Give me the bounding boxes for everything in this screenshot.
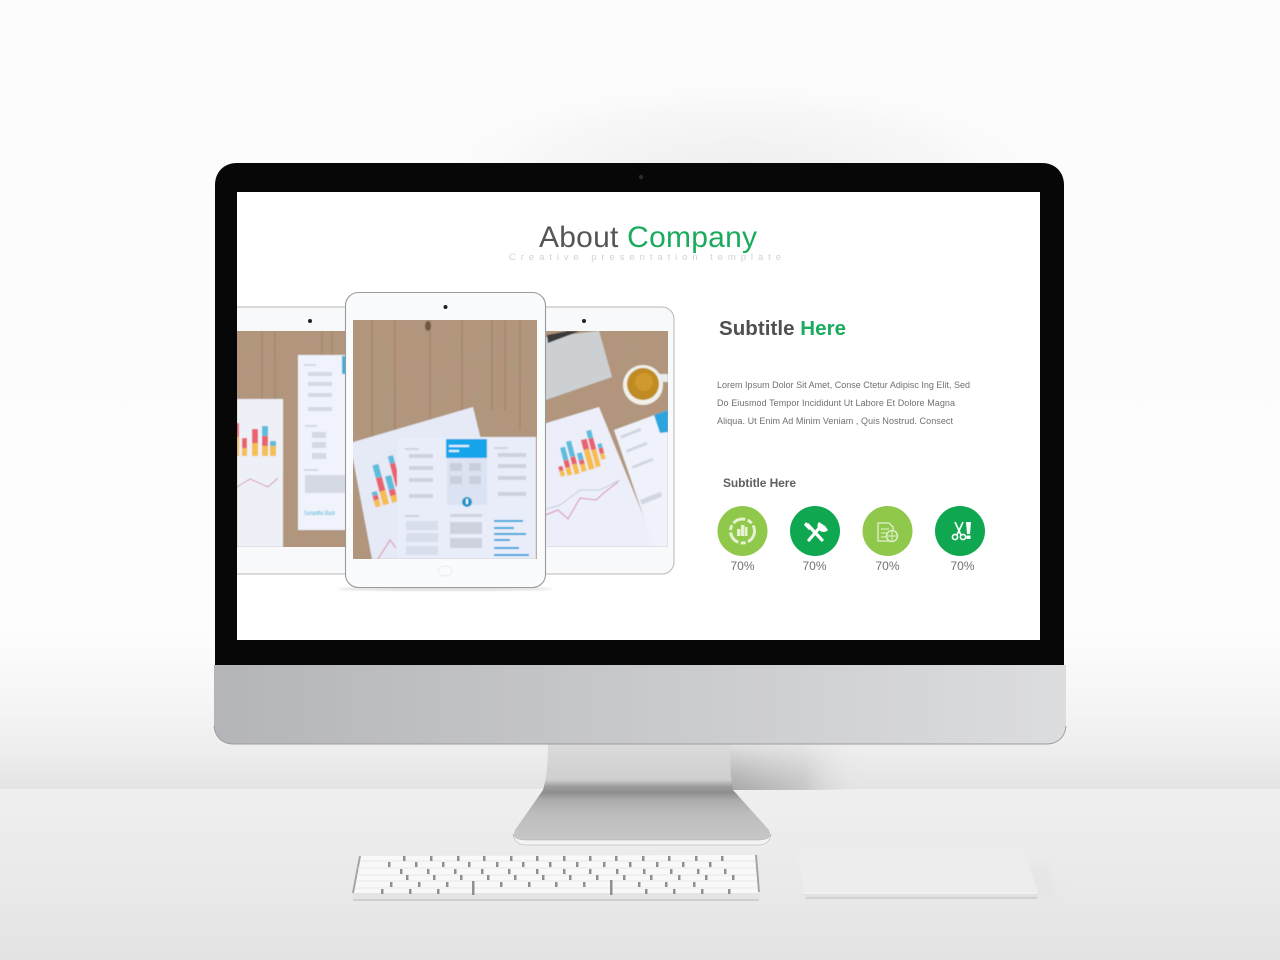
laptop <box>540 331 612 402</box>
stat: tools icon 70%: 70% <box>802 559 827 573</box>
trackpad <box>797 853 1056 898</box>
monitor black bezel <box>215 163 1064 665</box>
bar chart: right tablet <box>558 429 606 478</box>
body paragraph: Aliqua. Ut Enim Ad Minim Veniam , Quis Nostrud. Consect <box>717 416 953 426</box>
tablet: center <box>337 292 553 590</box>
monitor stand <box>513 744 864 845</box>
stat: chart icon 70%: 70% <box>730 559 755 573</box>
stat: document globe icon 70%: 70% <box>875 559 900 573</box>
webcam <box>639 175 643 179</box>
stat: scissors icon 70% <box>935 506 985 573</box>
body paragraph <box>717 380 970 426</box>
bar chart: left tablet <box>237 423 276 456</box>
stat: scissors icon 70%: 70% <box>950 559 975 573</box>
desk surface <box>0 789 1280 960</box>
monitor <box>200 163 1066 744</box>
tablet: left: Samantha Black <box>304 511 336 517</box>
chart paper <box>540 407 656 547</box>
tablet: right <box>546 306 674 574</box>
bar chart: center tablet <box>371 454 398 508</box>
skill bars <box>494 520 529 556</box>
body paragraph: Lorem Ipsum Dolor Sit Amet, Conse Ctetur Adipisc Ing Elit, Sed <box>717 380 970 390</box>
screen slide <box>200 192 1040 640</box>
monitor chin <box>214 665 1066 744</box>
wall halo behind monitor <box>420 75 1060 265</box>
keyboard <box>353 855 759 900</box>
coffee cup <box>623 365 668 405</box>
back chart paper <box>353 406 481 559</box>
tablet: left <box>237 306 345 574</box>
front resume <box>397 437 536 559</box>
stat: chart icon 70% <box>718 506 768 573</box>
subtitle heading: Subtitle Here <box>719 317 846 340</box>
stat: document globe icon 70% <box>862 506 912 573</box>
body paragraph: Do Eiusmod Tempor Incididunt Ut Labore Et Dolore Magna <box>717 398 955 408</box>
slide tagline: Creative presentation template <box>509 252 781 263</box>
stat: tools icon 70% <box>790 506 840 573</box>
secondary subtitle: Subtitle Here <box>723 476 796 490</box>
slide title: About Company <box>539 221 757 254</box>
